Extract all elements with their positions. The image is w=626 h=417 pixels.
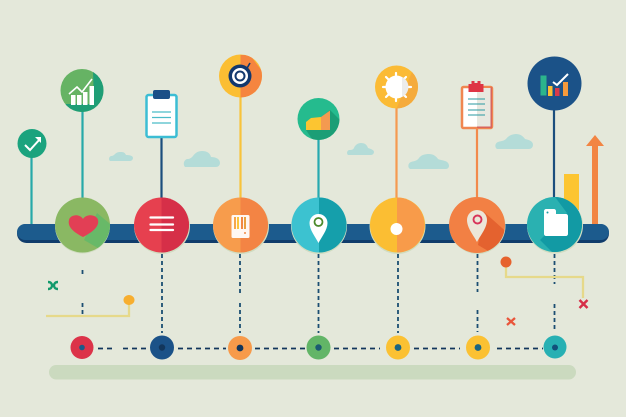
top icon: target xyxy=(219,54,262,98)
top icon: navy chart badge xyxy=(528,56,582,110)
node 7: folder xyxy=(527,197,583,254)
right yellow connector with dot and cross xyxy=(500,256,588,308)
top icon: check arrow badge xyxy=(18,129,46,158)
dot 5 yellow xyxy=(386,336,410,360)
cloud 4 xyxy=(408,154,449,169)
cloud 1 xyxy=(109,152,133,161)
small green glyph xyxy=(48,282,58,289)
node 6: orange pin xyxy=(449,197,506,254)
rising arrow xyxy=(586,135,604,226)
dot 7 teal xyxy=(544,336,566,358)
node 4: teal pin xyxy=(291,198,347,254)
cloud 5 xyxy=(495,134,533,149)
top icon: green badge with shape xyxy=(298,98,340,140)
cloud 3 xyxy=(347,143,374,155)
node 1: heart xyxy=(55,198,110,254)
node 2: menu lines xyxy=(134,198,190,254)
horizontal dashed line xyxy=(98,348,543,350)
cloud 2 xyxy=(184,151,220,167)
dot 1 red xyxy=(70,336,94,359)
dot 2 navy xyxy=(150,336,174,360)
main timeline bar xyxy=(17,224,609,243)
small orange cross xyxy=(507,318,515,325)
stems xyxy=(32,96,554,226)
dot 3 orange xyxy=(228,336,252,360)
dot 6 yellow xyxy=(466,336,490,360)
yellow bar xyxy=(564,174,579,210)
top icon: clipboard with red clip xyxy=(462,81,492,128)
node 3: document xyxy=(213,198,269,254)
top icon: growth chart badge xyxy=(60,69,104,112)
bottom base bar xyxy=(49,365,576,380)
dot 4 green xyxy=(306,336,330,360)
node 5: yellow dot xyxy=(370,198,426,254)
left yellow connector with dot xyxy=(46,295,134,316)
timeline dots xyxy=(70,336,566,360)
dashed connectors xyxy=(82,254,554,333)
top icon: clipboard xyxy=(146,90,176,137)
top icon: sun gear xyxy=(375,66,418,108)
